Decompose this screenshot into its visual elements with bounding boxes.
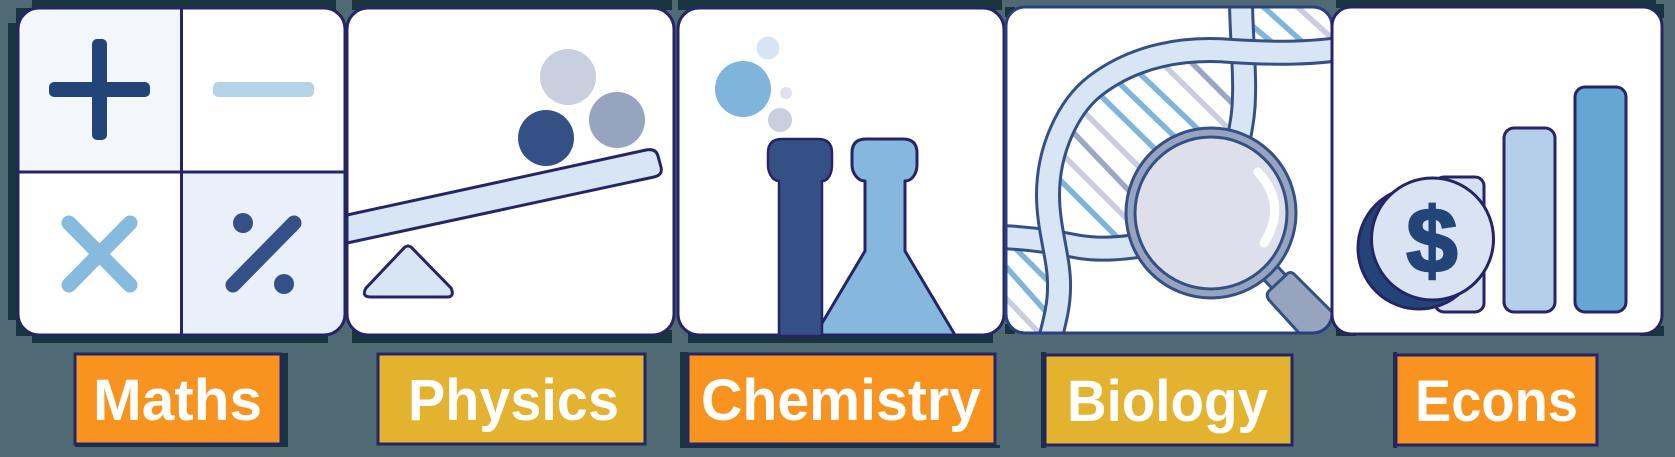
label: Maths: Maths (93, 368, 262, 433)
panel: Chemistry (678, 8, 1004, 336)
label: Biology: Biology (1067, 369, 1268, 434)
icon: minus (213, 82, 314, 97)
panel: Biology (1000, 0, 1340, 345)
icon: balls (518, 49, 645, 166)
icon: DNA helix (1000, 0, 1340, 340)
icon: dollar coin: $ (1406, 190, 1458, 292)
label: Econs (1396, 355, 1597, 445)
icon: magnifying glass (1126, 128, 1340, 345)
icon: seesaw beam (347, 150, 661, 243)
label: Maths (75, 354, 281, 444)
label: Physics (378, 354, 645, 444)
panel: Physics (347, 8, 674, 335)
icon: dark flask (768, 139, 832, 336)
label: Chemistry (688, 354, 995, 444)
icon: medium bar (1504, 128, 1555, 312)
label: Chemistry: Chemistry (701, 368, 981, 433)
icon: plus (49, 39, 150, 140)
icon: multiply (69, 223, 130, 285)
label: Biology (1045, 355, 1292, 445)
label: Econs: Econs (1415, 369, 1578, 434)
icon: bubbles (715, 36, 792, 132)
icon: small bar (1435, 177, 1484, 312)
icon: seesaw pivot (364, 246, 452, 297)
icon: light flask (815, 139, 955, 335)
panel: Econs (1332, 7, 1662, 334)
icon: percent (233, 213, 294, 294)
icon: dollar coin (1358, 178, 1494, 309)
panel: Maths (18, 8, 345, 335)
icon: tall bar (1575, 87, 1626, 312)
label: Physics: Physics (408, 368, 619, 433)
